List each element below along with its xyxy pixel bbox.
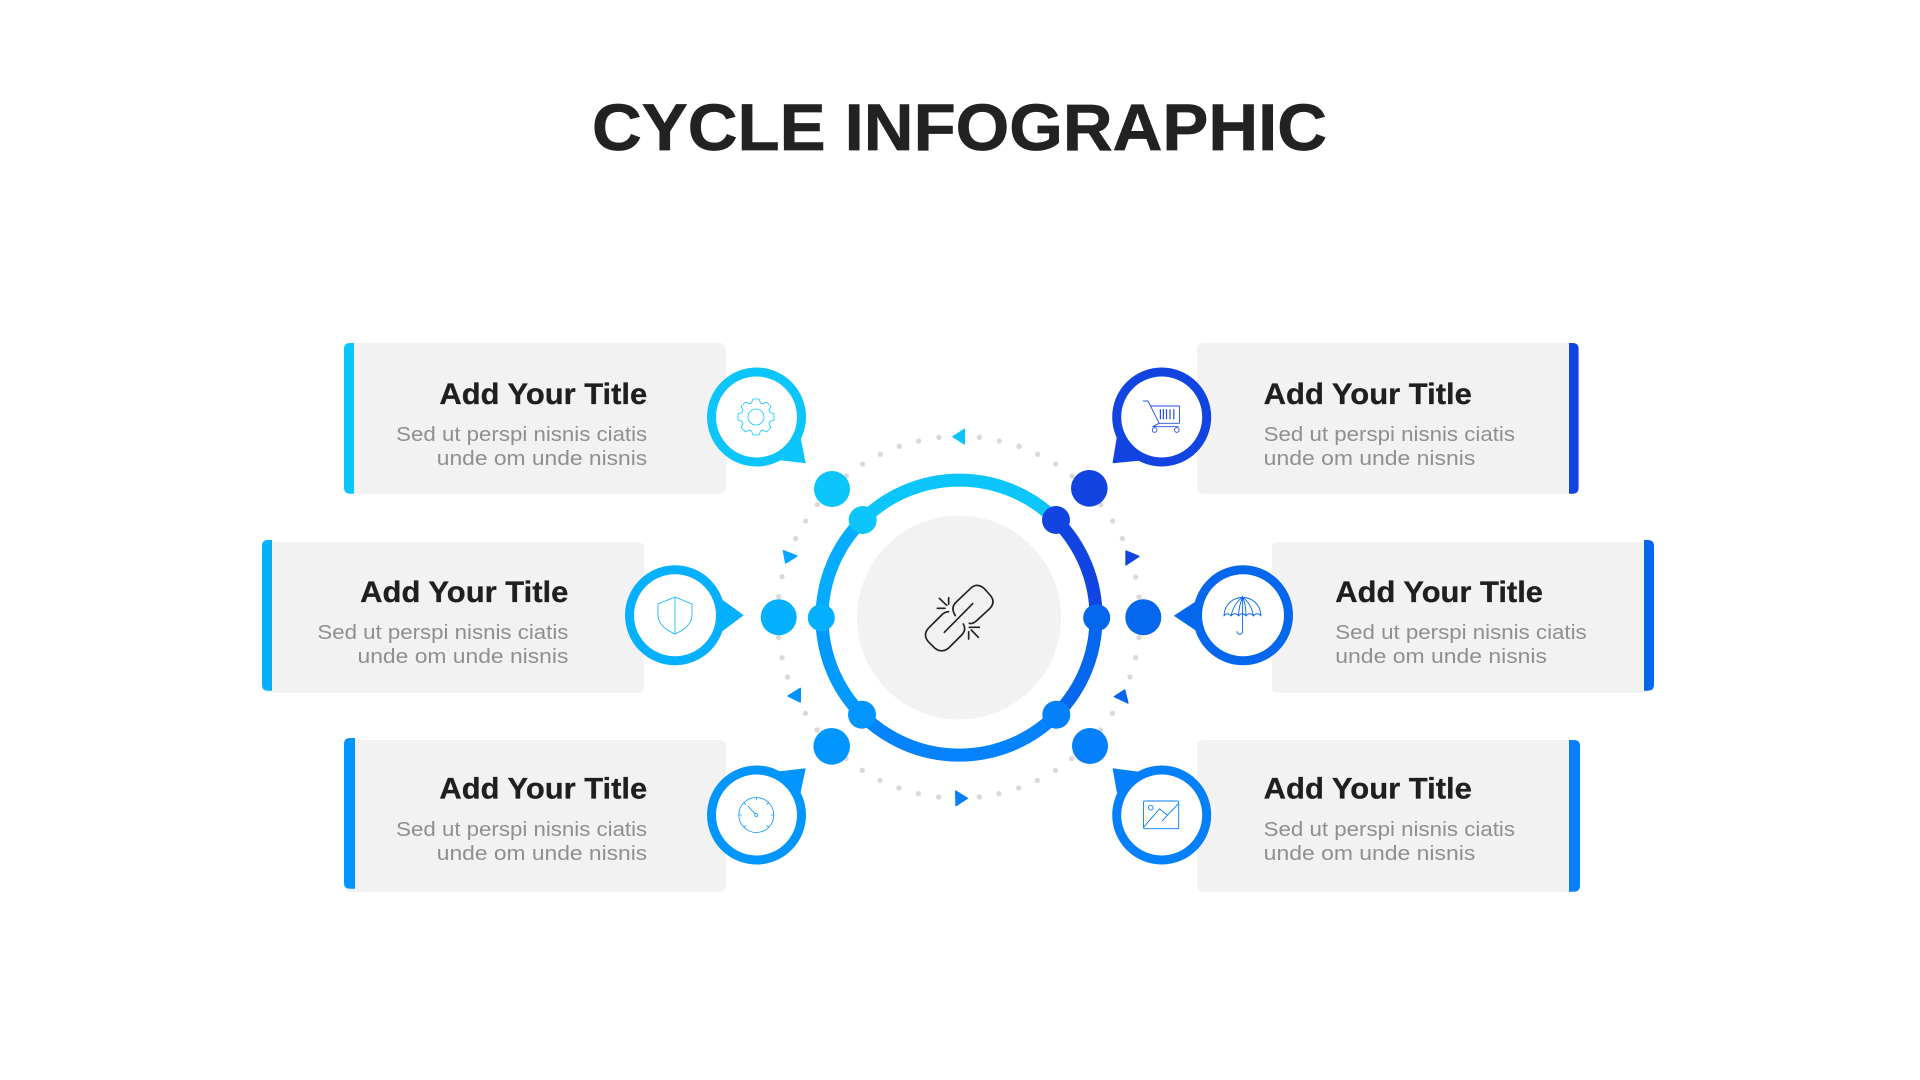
- panel: top right: Sed ut perspi nisnis ciatis: [1264, 423, 1515, 446]
- panel: top left: [344, 343, 726, 494]
- panel: bottom right: unde om unde nisnis: [1264, 842, 1475, 865]
- panel: top right: [1197, 343, 1579, 494]
- icon: broken chain link: [925, 585, 993, 651]
- panel: bottom right: Add Your Title: [1264, 773, 1472, 806]
- panel: middle right: Add Your Title: [1335, 576, 1543, 609]
- icon: shield: [658, 597, 692, 634]
- panel: bottom right: [1197, 740, 1580, 892]
- panel: middle left: Add Your Title: [360, 576, 568, 609]
- panel: bottom left: Sed ut perspi nisnis ciatis: [396, 818, 647, 841]
- panel: bottom left: unde om unde nisnis: [437, 842, 647, 865]
- orbit direction arrows: [783, 429, 1139, 806]
- panel: top left: Add Your Title: [439, 378, 647, 411]
- bubble: umbrella: [1174, 570, 1288, 661]
- icon: picture: [1144, 801, 1179, 829]
- outer connector dots: [761, 470, 1161, 765]
- bubble: picture: [1112, 768, 1207, 860]
- panel: bottom right: Sed ut perspi nisnis ciatis: [1264, 818, 1515, 841]
- panel: middle left: Sed ut perspi nisnis ciatis: [317, 621, 568, 644]
- panel: top right: Add Your Title: [1264, 378, 1472, 411]
- ring nodes: [808, 506, 1110, 729]
- dotted orbit: [776, 435, 1142, 800]
- panel: bottom left: [344, 738, 726, 892]
- bubble: gear: [712, 372, 806, 463]
- panel: top left: unde om unde nisnis: [437, 447, 647, 470]
- panel: middle right: Sed ut perspi nisnis ciatis: [1335, 621, 1587, 644]
- icon: gauge: [739, 798, 774, 832]
- panel: middle left: [262, 540, 644, 693]
- icon: umbrella: [1224, 596, 1261, 634]
- panel: top left: Sed ut perspi nisnis ciatis: [396, 423, 647, 446]
- bubble: cart: [1112, 372, 1207, 463]
- title: CYCLE INFOGRAPHIC: [592, 90, 1327, 164]
- icon: shopping cart: [1143, 401, 1180, 432]
- bubble: shield: [630, 570, 744, 661]
- central ring: [822, 480, 1096, 755]
- panel: bottom left: Add Your Title: [439, 773, 647, 806]
- panel: middle left: unde om unde nisnis: [358, 645, 568, 668]
- panel: middle right: unde om unde nisnis: [1335, 645, 1547, 668]
- panel: top right: unde om unde nisnis: [1264, 447, 1475, 470]
- center disc: [857, 516, 1061, 720]
- panel: middle right: [1272, 540, 1654, 693]
- bubble: gauge: [712, 768, 806, 860]
- icon: gear: [738, 399, 774, 435]
